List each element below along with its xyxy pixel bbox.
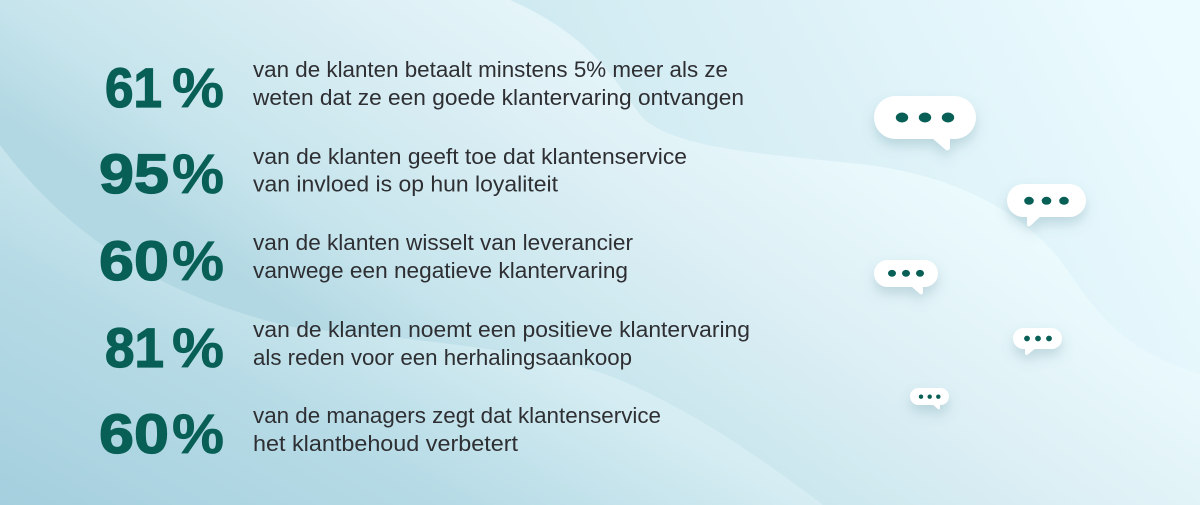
icon: speech bubble large [874,96,976,150]
percentage 60%: 60 [99,229,169,292]
icon: speech bubble medium-large [1007,184,1086,226]
icon: speech bubble medium [874,260,938,294]
percentage 95% [99,142,224,205]
percentage 60%: 60 [99,402,169,465]
description 3: vanwege een negatieve klantervaring [253,258,628,283]
description 4: van de klanten noemt een positieve klantervaring [253,317,750,342]
percentage 61%: % [172,56,224,119]
description 1: weten dat ze een goede klantervaring ontvangen [252,85,744,110]
percentage 60% [99,402,224,465]
wave: top right [510,0,1200,374]
percentage 60% [99,229,224,292]
percentage 60%: % [172,402,224,465]
statistic row 3 [99,229,634,292]
description 5 [253,403,661,456]
percentage 95%: 95 [99,142,169,205]
icon: speech bubble extra small [910,388,949,409]
statistic row 5 [99,402,661,465]
description 4: als reden voor een herhalingsaankoop [253,345,632,370]
description 4 [253,317,750,370]
icon: speech bubble small [1013,328,1062,355]
percentage 81% [105,316,224,379]
description 5: van de managers zegt dat klantenservice [253,403,661,428]
statistic row 4 [105,316,750,379]
description 2 [253,144,687,196]
description 3: van de klanten wisselt van leverancier [253,230,634,255]
description 1: van de klanten betaalt minstens 5% meer als ze [253,57,728,82]
percentage 81%: % [172,316,224,379]
statistic row 1 [105,56,744,119]
wave: bottom left [0,145,823,505]
statistic row 2 [99,142,687,205]
percentage 60%: % [172,229,224,292]
description 5: het klantbehoud verbetert [253,431,519,456]
percentage 81%: 81 [105,316,164,379]
percentage 61% [105,56,224,119]
description 1 [252,57,744,110]
description 2: van de klanten geeft toe dat klantenservice [253,144,687,169]
description 3 [253,230,634,283]
description 2: van invloed is op hun loyaliteit [253,172,559,196]
percentage 61%: 61 [105,56,162,119]
percentage 95%: % [172,142,224,205]
